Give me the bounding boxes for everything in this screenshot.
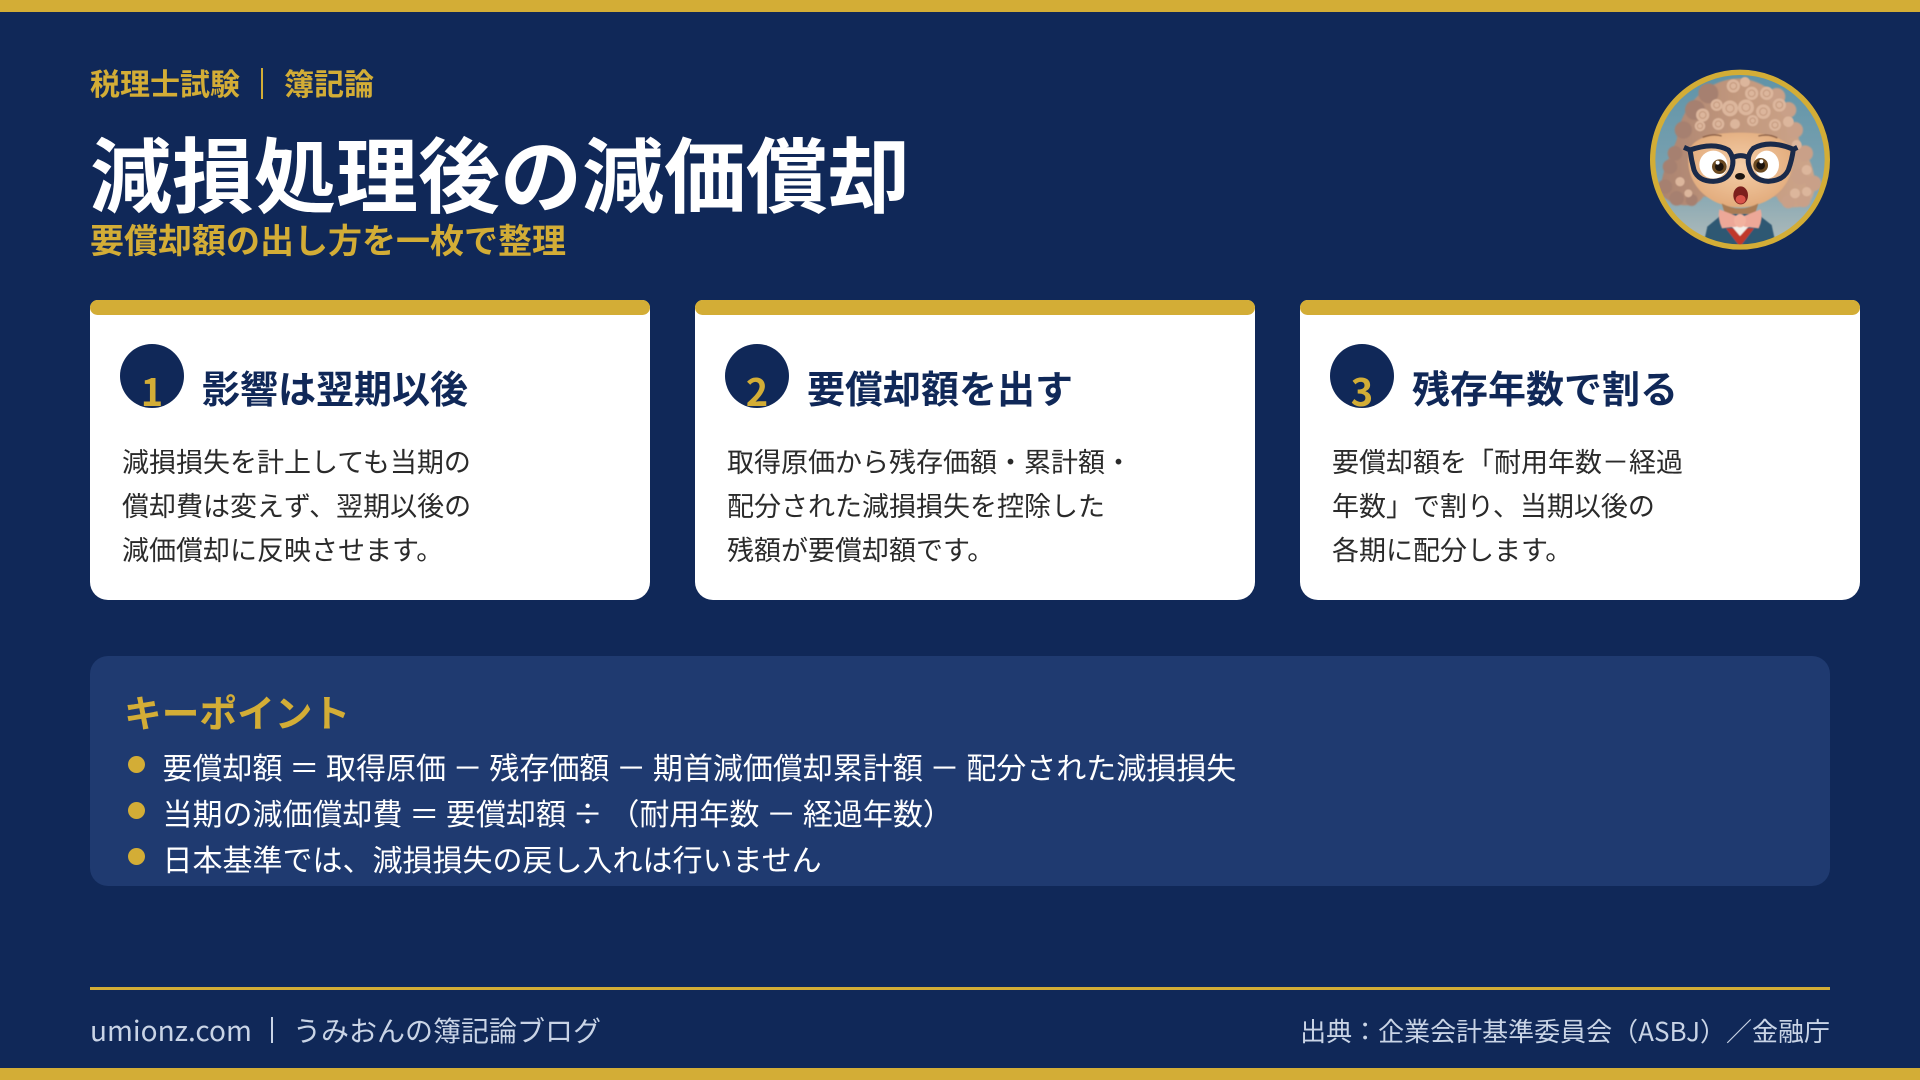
card 1 number badge <box>120 344 184 408</box>
top gold bar <box>0 0 1920 12</box>
card 2 body: 取得原価から残存価額・累計額・ 配分された減損損失を控除した 残額が要償却額です。 <box>727 441 1132 568</box>
footer left: site and blog name: umionz.com <box>90 1010 252 1050</box>
icon: avatar character with glasses <box>1650 70 1830 250</box>
eyebrow: category: 簿記論 <box>284 60 374 104</box>
footer rule <box>90 987 1830 990</box>
card 1 body: 減損損失を計上しても当期の 償却費は変えず、翌期以後の 減価償却に反映させます。 <box>122 441 471 568</box>
bottom gold bar <box>0 1068 1920 1080</box>
eyebrow: category: 税理士試験 <box>90 60 240 104</box>
bullet 3: 日本基準では、減損損失の戻し入れは行いません <box>162 836 822 880</box>
eyebrow: category <box>90 60 374 104</box>
panel: card 2 <box>695 300 1255 600</box>
bullet 2: 当期の減価償却費 ＝ 要償却額 ÷ （耐用年数 － 経過年数） <box>162 790 953 834</box>
panel: key points <box>90 656 1830 886</box>
footer left: site and blog name: うみおんの簿記論ブログ <box>293 1010 601 1050</box>
card 2 number badge: 2 <box>746 362 768 417</box>
card 3 body: 要償却額を「耐用年数－経過 年数」で割り、当期以後の 各期に配分します。 <box>1332 441 1683 568</box>
card 1 accent bar <box>90 300 650 315</box>
card 2 number badge <box>725 344 789 408</box>
key points heading: キーポイント <box>124 683 350 738</box>
card 1 heading: 影響は翌期以後 <box>202 359 468 414</box>
subtitle: 要償却額の出し方を一枚で整理 <box>90 214 566 263</box>
card 3 number badge <box>1330 344 1394 408</box>
card 1 number badge: 1 <box>141 362 163 417</box>
card 2 heading: 要償却額を出す <box>807 359 1073 414</box>
footer left: site and blog name <box>90 1010 601 1050</box>
panel: card 1 <box>90 300 650 600</box>
card 2 accent bar <box>695 300 1255 315</box>
panel: card 3 <box>1300 300 1860 600</box>
footer right: source: 出典：企業会計基準委員会（ASBJ）／金融庁 <box>1300 1012 1830 1049</box>
card 3 heading: 残存年数で割る <box>1412 359 1678 414</box>
title: 減損処理後の減価償却 <box>90 111 910 230</box>
card 3 number badge: 3 <box>1351 362 1373 417</box>
card 3 accent bar <box>1300 300 1860 315</box>
bullet 1: 要償却額 ＝ 取得原価 － 残存価額 － 期首減価償却累計額 － 配分された減損損失 <box>162 744 1236 788</box>
